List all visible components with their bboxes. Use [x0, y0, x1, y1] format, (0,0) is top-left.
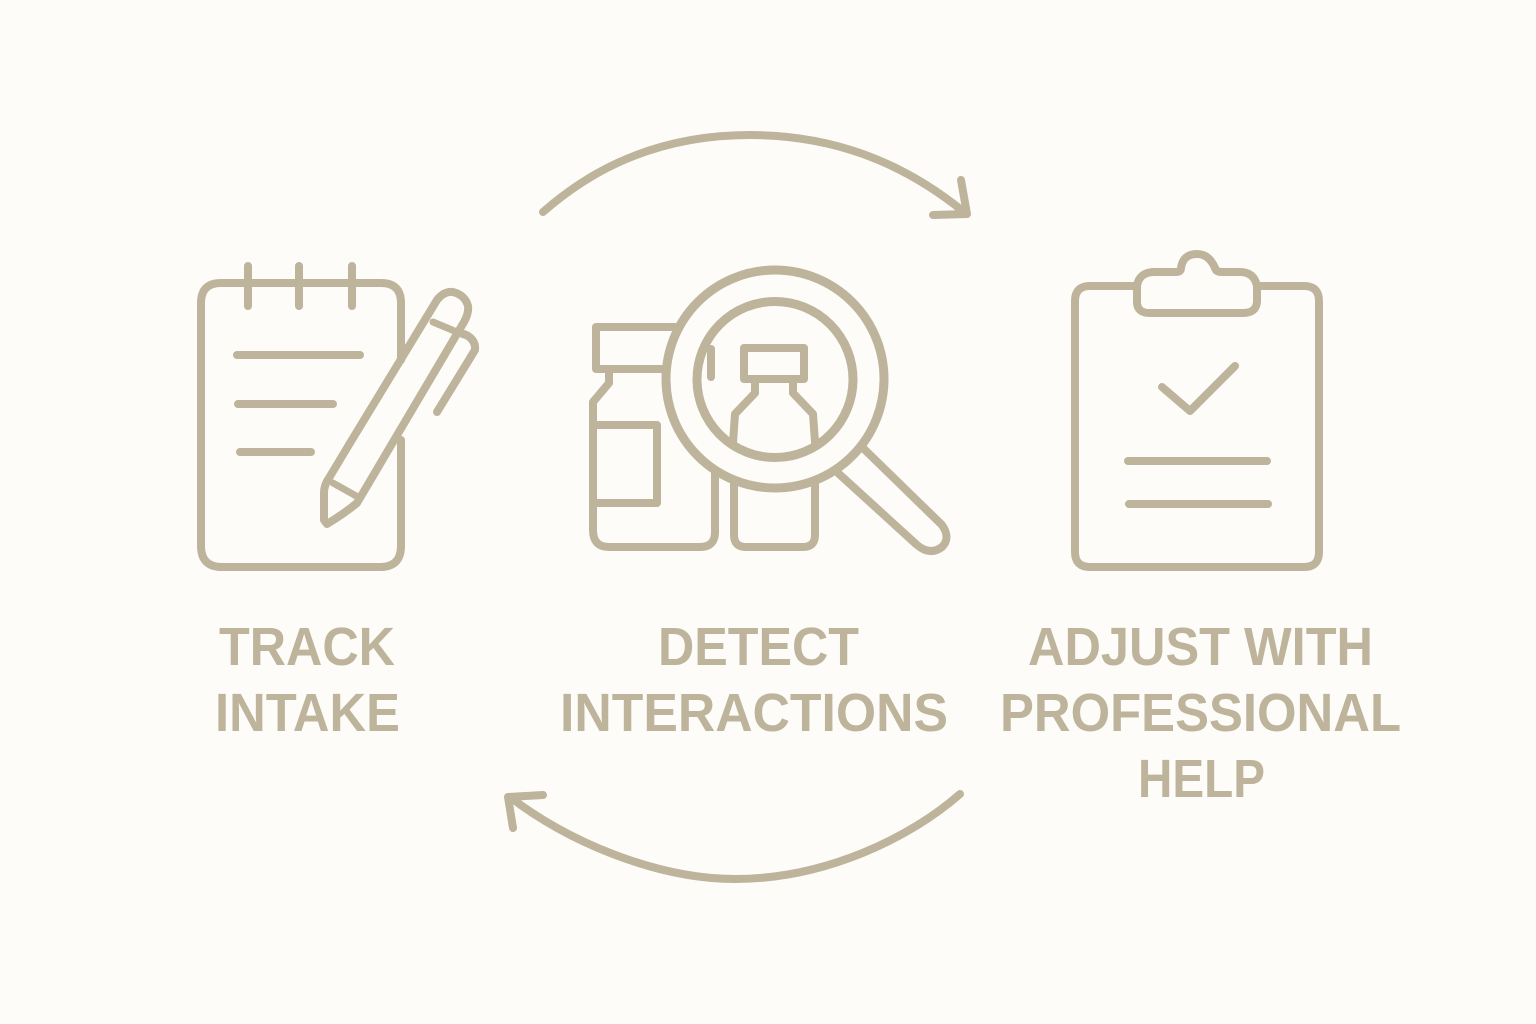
- arrow: bottom curved arrow: [508, 794, 960, 879]
- label: detect interactions: INTERACTIONS: [560, 683, 948, 743]
- icon: notepad and pencil: [201, 266, 475, 567]
- label: adjust with professional help: HELP: [1138, 749, 1265, 809]
- icon: clipboard with check: [1075, 254, 1319, 567]
- label: detect interactions: [560, 617, 948, 743]
- label: adjust with professional help: ADJUST WITH: [1028, 617, 1373, 677]
- label: track intake: TRACK: [219, 617, 395, 677]
- label: track intake: [215, 617, 400, 743]
- icon: medicine bottles and magnifying glass: [593, 270, 946, 551]
- label: detect interactions: DETECT: [658, 617, 859, 677]
- label: adjust with professional help: PROFESSIONAL: [1000, 683, 1401, 743]
- label: track intake: INTAKE: [215, 683, 400, 743]
- arrow: top curved arrow: [543, 135, 967, 215]
- label: adjust with professional help: [1000, 617, 1401, 809]
